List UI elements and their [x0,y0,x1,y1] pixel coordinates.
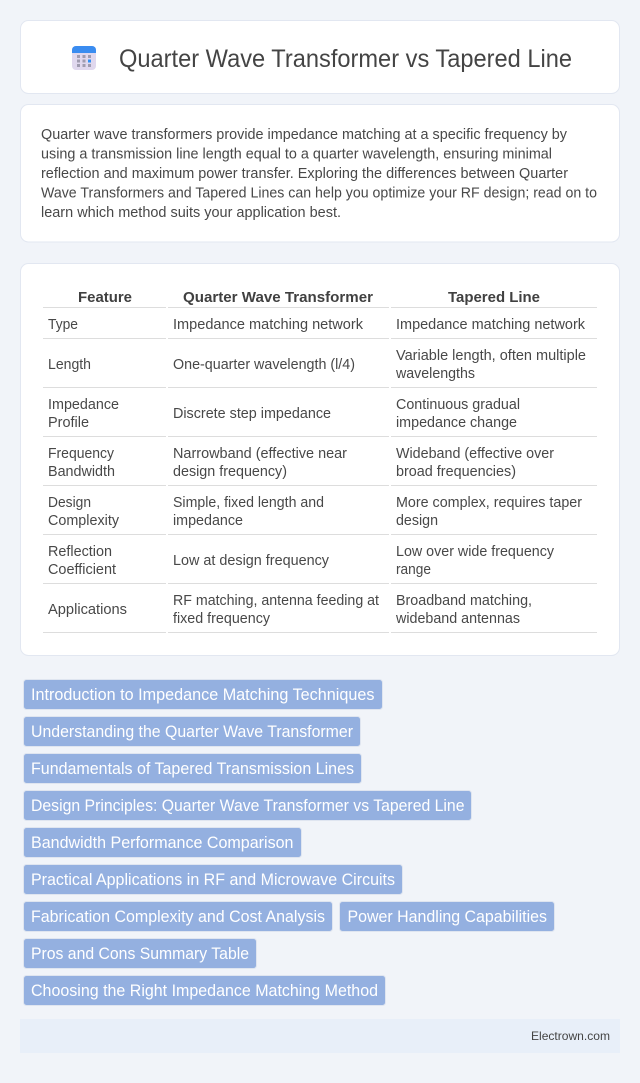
row: design complexity: Design [48,495,91,511]
table header row [43,290,597,308]
row: reflection coefficient: Low over wide frequency [396,544,555,560]
row: length: Variable length, often multiple [396,348,586,364]
tag: introduction: Introduction to Impedance Matching Techniques [31,686,374,704]
row: applications: wideband antennas [395,611,520,627]
row: design complexity: Complexity [48,513,120,529]
intro text: Wave Transformers and Tapered Lines can help you optimize your RF design; read on to [41,186,597,202]
row: type [43,317,597,339]
tag: choosing method: Choosing the Right Impedance Matching Method [31,982,378,1000]
tag: power handling: Power Handling Capabilities [348,908,547,926]
row: type: Impedance matching network [396,317,586,333]
row: applications: fixed frequency [173,611,271,627]
table header row: Tapered Line [448,290,540,306]
tag: fabrication: Fabrication Complexity and Cost Analysis [31,908,325,926]
row: applications: RF matching, antenna feeding at [173,593,379,609]
row: length: wavelengths [395,366,475,382]
intro text: learn which method suits your application best. [41,205,341,221]
row: impedance profile: Profile [48,415,89,431]
row: applications [43,593,597,633]
tag: pros and cons [24,938,256,968]
tag: bandwidth: Bandwidth Performance Comparison [31,834,294,852]
comparison table panel [20,264,620,656]
row: length: Length [48,357,91,373]
title: Quarter Wave Transformer vs Tapered Line [119,45,572,73]
row: design complexity [43,495,597,535]
tag: design principles [24,790,472,820]
footer [20,1019,620,1053]
intro text [41,127,597,221]
row: design complexity: More complex, requires taper [396,495,582,511]
row: length [43,348,597,388]
table header row: Feature [78,290,132,306]
row: frequency bandwidth: Wideband (effective over [396,446,554,462]
tag: quarter wave transformer: Understanding the Quarter Wave Transformer [31,723,353,741]
footer: Electrown.com [531,1029,610,1043]
row: type: Impedance matching network [173,317,364,333]
tag: pros and cons: Pros and Cons Summary Table [31,945,249,963]
tag: tapered lines [24,754,362,784]
row: design complexity: Simple, fixed length and [173,495,324,511]
row: design complexity: impedance [173,513,243,529]
tag: tapered lines: Fundamentals of Tapered Transmission Lines [31,760,354,778]
row: reflection coefficient: range [396,562,431,578]
row: impedance profile: Continuous gradual [396,397,520,413]
tag: fabrication [24,902,332,932]
row: type: Type [48,317,78,333]
row: reflection coefficient: Reflection [48,544,112,560]
topic tag list [24,680,554,1006]
intro text: using a transmission line length equal to a quarter wavelength, ensuring minimal [41,146,552,162]
row: length: One-quarter wavelength (l/4) [173,357,355,373]
row: frequency bandwidth: Frequency [48,446,115,462]
icon: calendar [72,46,96,70]
intro text: Quarter wave transformers provide impedance matching at a specific frequency by [41,127,568,143]
intro text: reflection and maximum power transfer. Exploring the differences between Quarter [41,166,568,182]
tag: power handling [340,902,554,932]
row: frequency bandwidth: design frequency) [173,464,287,480]
tag: bandwidth [24,828,302,858]
row: impedance profile [43,397,597,437]
tag: practical applications [24,864,402,894]
row: impedance profile: Discrete step impedance [173,406,331,422]
row: design complexity: design [396,513,438,529]
row: frequency bandwidth: Bandwidth [48,464,115,480]
row: frequency bandwidth: broad frequencies) [396,464,516,480]
row: reflection coefficient: Coefficient [48,562,116,578]
row: impedance profile: Impedance [48,397,119,413]
tag: design principles: Design Principles: Quarter Wave Transformer vs Tapered Line [31,797,464,815]
row: frequency bandwidth: Narrowband (effective near [173,446,347,462]
tag: choosing method [24,976,386,1006]
intro panel [20,104,620,242]
row: reflection coefficient [43,544,597,584]
row: frequency bandwidth [43,446,597,486]
tag: practical applications: Practical Applications in RF and Microwave Circuits [31,871,395,889]
tag: introduction [24,680,382,710]
table header row: Quarter Wave Transformer [183,290,373,306]
header panel [20,20,620,94]
row: applications: Applications [48,602,127,618]
row: reflection coefficient: Low at design frequency [173,553,330,569]
tag: quarter wave transformer [24,716,360,746]
row: impedance profile: impedance change [396,415,517,431]
row: applications: Broadband matching, [396,593,532,609]
